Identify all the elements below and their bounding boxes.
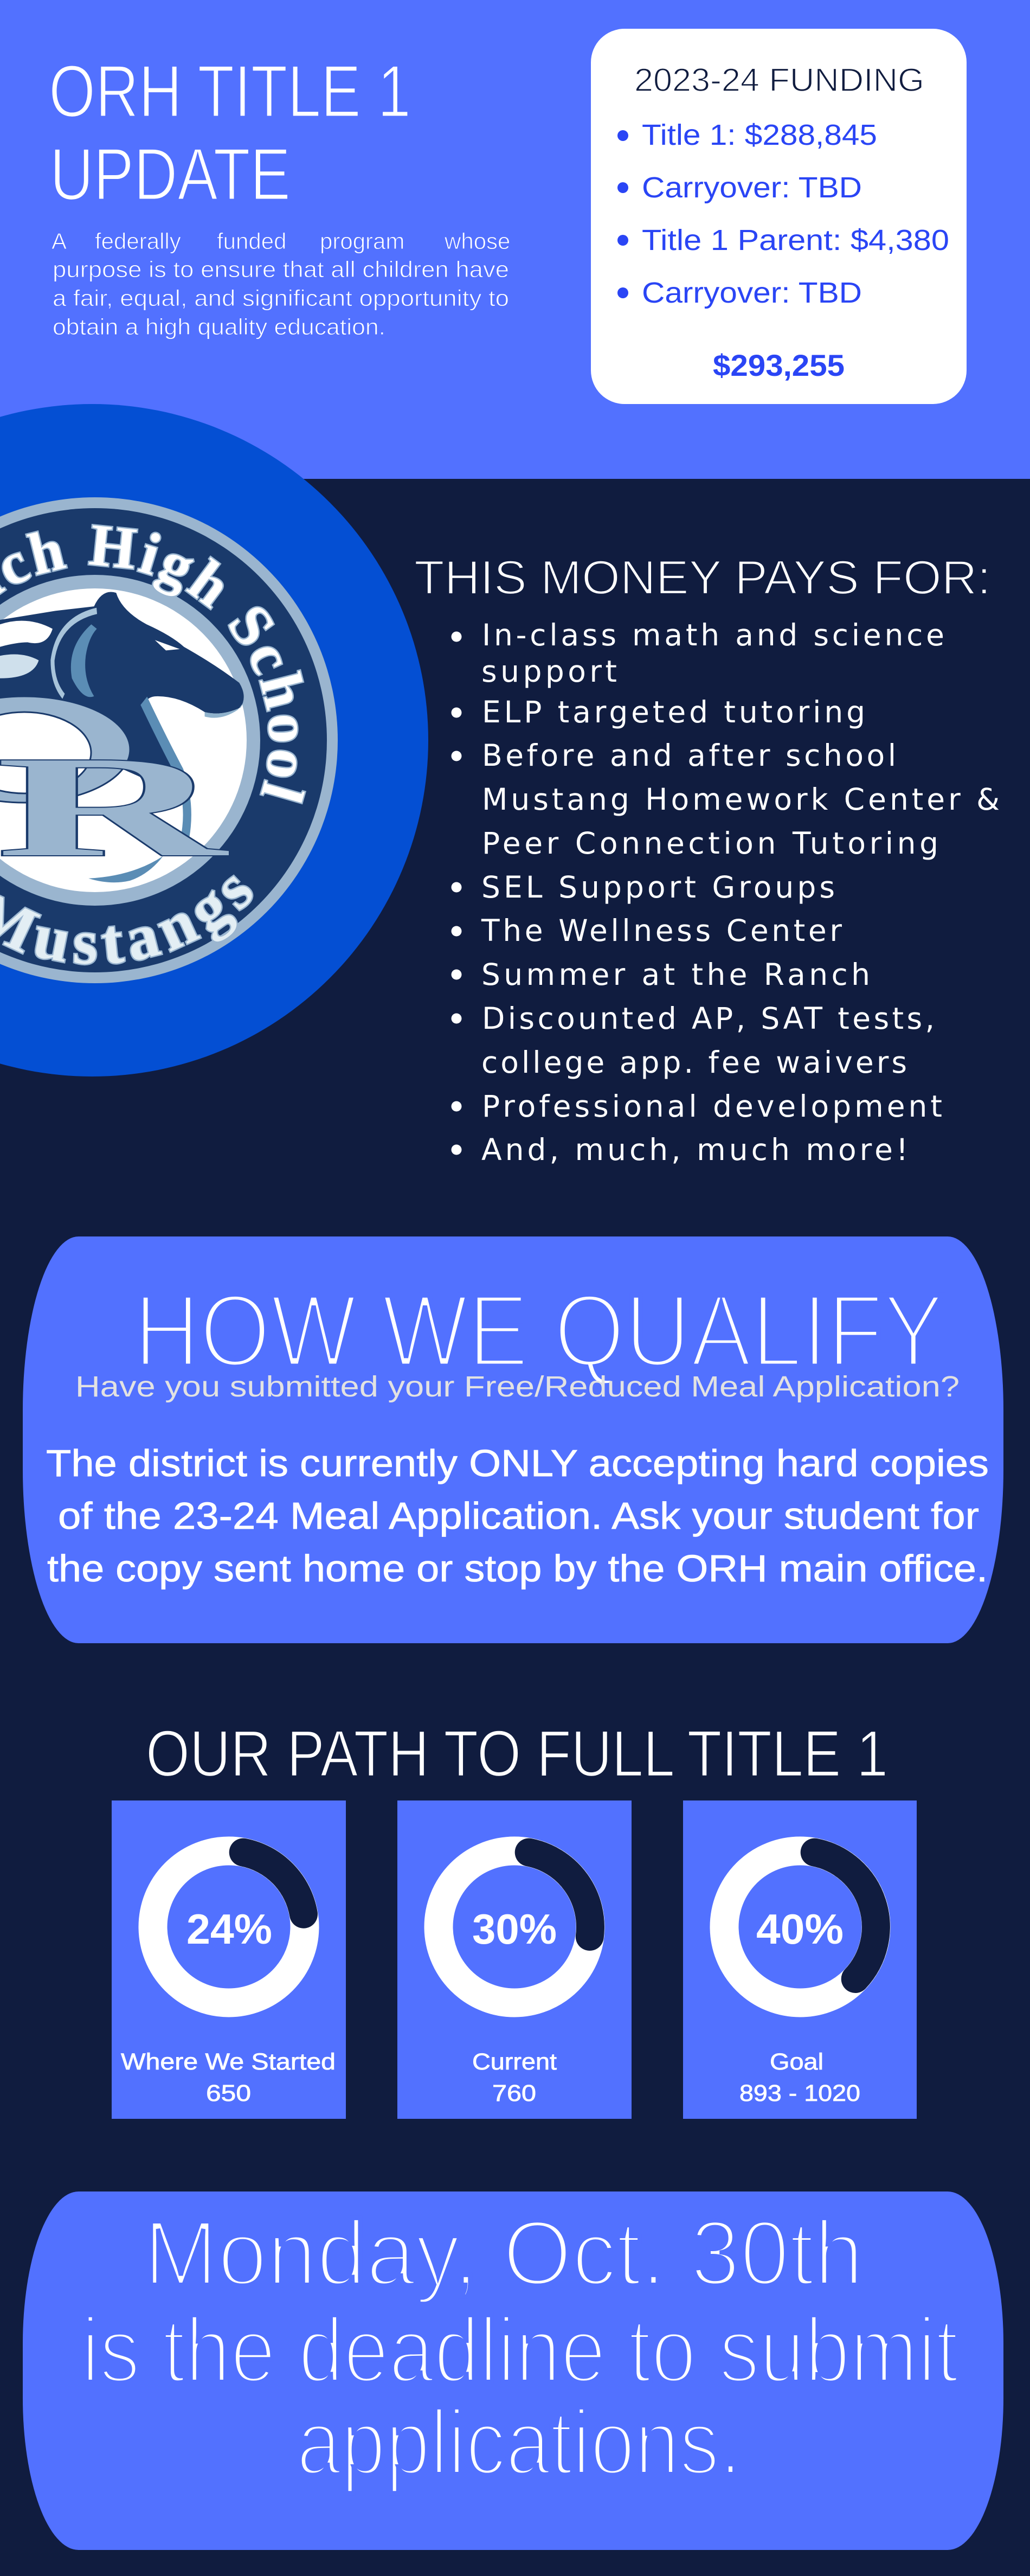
donut chart 30%: 30% [472,1905,557,1953]
intro paragraph: whose [444,228,510,254]
bullet list: ELP targeted tutoring [482,695,865,729]
bullet list: SEL Support Groups [481,870,835,905]
card label: Current [472,2049,557,2075]
funding list: Title 1 Parent: $4,380 [642,224,949,257]
panel: current card [397,1800,632,2119]
school logo circle [0,404,428,1076]
title [49,50,411,215]
card label: Where We Started [121,2049,336,2075]
intro paragraph [52,228,510,339]
panel: how we qualify [23,1236,1003,1643]
funding total: $293,255 [713,348,845,382]
qualify body text: the copy sent home or stop by the ORH main office. [47,1547,988,1590]
bullet list: Discounted AP, SAT tests, [482,1001,935,1036]
bullet list: Professional development [482,1089,942,1124]
qualify body text: of the 23-24 Meal Application. Ask your student for [58,1495,979,1537]
deadline text: applications. [297,2391,742,2494]
card label [739,2049,860,2106]
section heading: path to full title 1: OUR PATH TO FULL TITLE 1 [146,1716,888,1790]
deadline text: Monday, Oct. 30th [144,2202,864,2305]
card label: 760 [492,2080,536,2106]
bullet list: Before and after school [482,738,896,773]
intro paragraph: A [52,228,67,254]
intro paragraph: federally [95,228,181,254]
bullet list: Mustang Homework Center & [482,782,1000,817]
panel: where we started card [112,1800,346,2119]
funding list: Carryover: TBD [642,171,862,204]
card label [121,2049,336,2106]
bullet list: Peer Connection Tutoring [482,826,938,861]
qualify subheading: Have you submitted your Free/Reduced Meal Application? [75,1370,960,1403]
funding list: Title 1: $288,845 [642,119,877,151]
bullet list: support [481,654,617,689]
bullet list: Summer at the Ranch [481,957,870,992]
card label [472,2049,557,2106]
intro paragraph: program [320,228,404,254]
qualify heading: HOW WE QUALIFY [134,1273,944,1388]
donut chart 40% [724,1851,876,2003]
section heading: THIS MONEY PAYS FOR: [414,550,991,604]
donut chart 24%: 24% [186,1905,272,1953]
donut chart 40%: 40% [756,1905,844,1953]
logo mustang head [0,592,245,882]
intro paragraph: purpose is to ensure that all children have [53,257,509,282]
bullet list: And, much, much more! [481,1132,908,1167]
bullet list: college app. fee waivers [481,1045,907,1080]
logo monogram: R [0,725,231,888]
intro paragraph: obtain a high quality education. [53,314,385,339]
panel: deadline [23,2191,1003,2550]
donut chart 30% [439,1851,590,2003]
bullet list [451,618,1000,1167]
title: ORH TITLE 1 [49,50,411,132]
funding heading: 2023-24 FUNDING [634,62,924,98]
qualify body text [46,1442,989,1590]
funding list: Carryover: TBD [642,277,862,309]
bullet list: The Wellness Center [481,913,842,948]
deadline text [81,2202,958,2494]
qualify body text: The district is currently ONLY accepting hard copies [46,1442,989,1484]
title: UPDATE [50,133,291,215]
funding list [617,119,949,309]
card label: 893 - 1020 [739,2080,860,2106]
intro paragraph: a fair, equal, and significant opportunity to [53,285,509,311]
donut chart 24% [153,1851,305,2003]
card label: Goal [770,2049,823,2075]
panel: funding card [591,29,967,404]
bullet list: In-class math and science [482,618,944,652]
panel: this money pays for [414,550,1000,1167]
intro paragraph: funded [217,228,286,254]
card label: 650 [206,2080,251,2106]
panel: goal card [683,1800,917,2119]
panel: header band [0,0,1030,479]
